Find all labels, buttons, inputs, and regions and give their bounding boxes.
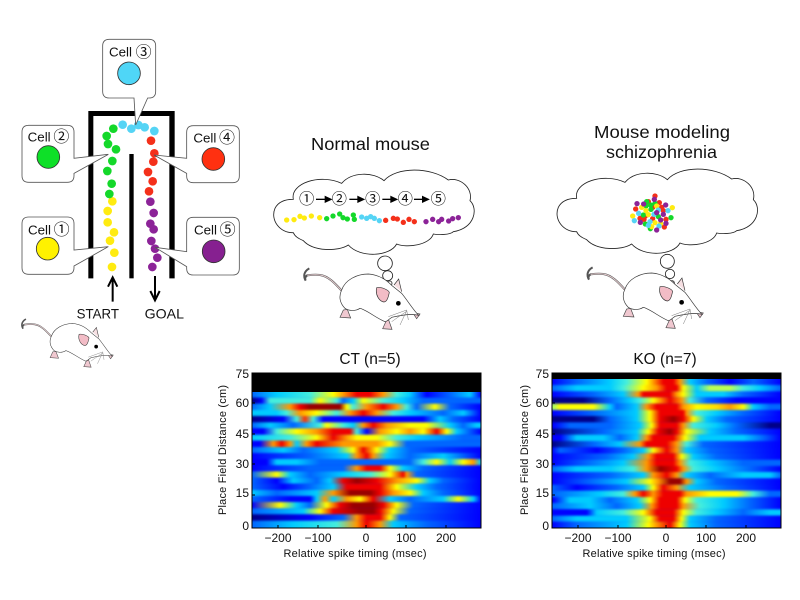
unsampled region: black band [552,373,781,379]
axes, ticks and labels: CT: −100 [304,531,332,545]
callout: cell 1: Cell [28,222,51,237]
mouse: schizophrenia model [588,267,703,328]
callout: cell 3 [103,39,156,125]
maze walls [88,111,175,278]
axes, ticks and labels: CT: 0 [242,519,249,533]
axes, ticks and labels: KO: 200 [736,531,756,545]
axes, ticks and labels: KO: −100 [604,531,632,545]
panel: CT heatmap chart [217,351,482,560]
sequence order labels: ① [299,191,314,208]
axes, ticks and labels: CT: 0 [363,531,370,545]
axes, ticks and labels: KO: 75 [536,367,549,381]
thought bubbles [378,256,393,286]
axes, ticks and labels: CT: 30 [236,457,249,471]
mouse: start of maze [22,319,113,367]
callout: cell 4 [154,126,239,183]
mouse: normal [304,268,420,329]
callout: cell 4: Cell [193,130,216,145]
axes, ticks and labels: CT: 200 [436,531,456,545]
ordered replay dots [284,211,461,225]
callout: cell 3: Cell [109,45,132,60]
callout: cell 2 [22,125,108,182]
axes, ticks and labels: CT: 75 [236,367,249,381]
axes, ticks and labels: KO [519,351,782,560]
sequence arrows [316,197,428,202]
callout: cell 2: ② [53,128,69,146]
callout: cell 5 [155,217,239,275]
arrow: start [108,277,117,302]
axes, ticks and labels: KO: 100 [696,531,716,545]
axes, ticks and labels: KO: Relative spike timing (msec) [582,548,726,560]
cell 5 place field dots [146,197,162,271]
callout: cell 2: Cell [28,129,51,144]
heading: mouse modeling schizophrenia: schizophrenia [606,142,717,162]
label: goal: GOAL [145,306,184,321]
label: start: START [77,306,120,321]
heading: mouse modeling schizophrenia: Mouse modeling [594,122,730,142]
panel: KO heatmap chart [519,351,782,560]
axes, ticks and labels: CT: CT (n=5) [339,351,401,368]
arrow: goal [150,276,160,300]
callout: cell 1 [22,217,108,274]
callout: cell 5: Cell [194,222,217,237]
maze diagram with cell callouts [22,39,239,321]
axes, ticks and labels: CT: 45 [236,427,249,441]
sequence order labels: ③ [365,191,380,208]
thought cloud: normal mouse [274,170,474,286]
axes, ticks and labels: KO: Place Field Distance (cm) [519,385,531,515]
axes, ticks and labels: CT: 60 [236,396,249,410]
sequence order labels: ⑤ [431,191,446,208]
unsampled region: black band [252,373,481,392]
axes, ticks and labels: CT: Relative spike timing (msec) [284,548,426,560]
cell 4 place field dots [144,136,159,196]
axes, ticks and labels: CT: −200 [264,531,292,545]
heading: normal mouse: Normal mouse [311,134,430,154]
axes, ticks and labels: KO: 0 [663,531,670,545]
axes, ticks and labels: CT [217,351,482,560]
axes, ticks and labels: KO: 60 [536,396,549,410]
axes, ticks and labels: KO: KO (n=7) [633,351,697,368]
callout: cell 3: ③ [136,43,152,61]
callout: cell 1: ① [54,221,70,239]
axes, ticks and labels: KO: 30 [536,457,549,471]
sequence order labels: ② [332,191,347,208]
axes, ticks and labels: KO: 15 [536,486,549,500]
thought bubbles [660,254,675,285]
heatmap: CT [252,373,481,528]
axes, ticks and labels: KO: 45 [536,427,549,441]
cell 3 place field dots [118,120,159,135]
thought cloud: schizophrenia mouse [557,169,758,285]
heatmap: KO [552,373,781,528]
axes, ticks and labels: CT: 100 [396,531,416,545]
cell 2 place field dots [102,124,120,198]
cell 1 place field dots [103,197,119,271]
callout: cell 5: ⑤ [220,221,236,239]
axes, ticks and labels: CT: 15 [236,486,249,500]
sequence order labels [299,191,446,208]
axes, ticks and labels: KO: −200 [564,531,592,545]
axes, ticks and labels: KO: 0 [542,519,549,533]
jumbled replay dots [630,193,675,233]
axes, ticks and labels: CT: Place Field Distance (cm) [217,385,229,515]
heading: mouse modeling schizophrenia [594,122,730,162]
sequence order labels: ④ [398,191,413,208]
callout: cell 4: ④ [219,129,235,147]
